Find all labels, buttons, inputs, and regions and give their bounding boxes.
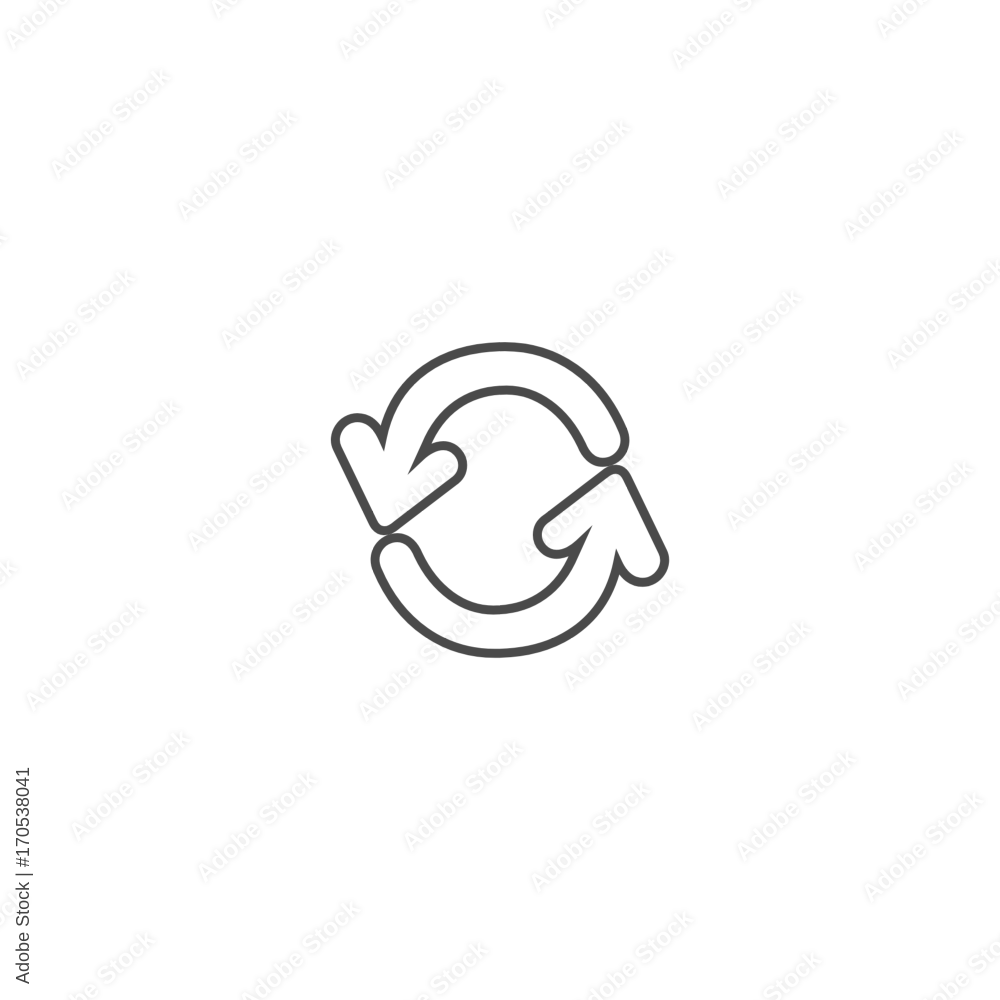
watermark pattern: Adobe Stock <box>503 113 636 236</box>
watermark pattern: Adobe Stock <box>674 283 807 406</box>
watermark pattern: Adobe Stock <box>396 734 529 857</box>
watermark pattern: Adobe Stock <box>523 775 656 898</box>
watermark pattern: Adobe Stock <box>513 444 646 567</box>
watermark pattern: Adobe Stock <box>341 273 474 396</box>
watermark pattern: Adobe Stock <box>836 123 969 246</box>
watermark pattern: Adobe Stock <box>223 563 356 686</box>
watermark pattern: Adobe Stock <box>386 403 519 526</box>
watermark pattern: Adobe Stock <box>213 232 346 355</box>
watermark pattern: Adobe Stock <box>376 72 509 195</box>
watermark pattern: Adobe Stock <box>556 573 689 696</box>
watermark pattern: Adobe Stock <box>170 103 303 226</box>
watermark pattern: Adobe Stock <box>729 744 862 867</box>
watermark pattern: Adobe Stock <box>8 263 141 386</box>
watermark pattern: Adobe Stock <box>546 242 679 365</box>
watermark pattern: Adobe Stock <box>53 393 186 516</box>
watermark pattern: Adobe Stock <box>709 82 842 205</box>
watermark pattern: Adobe Stock <box>719 413 852 536</box>
watermark pattern: Adobe Stock <box>63 724 196 847</box>
icon: circular refresh arrows <box>335 347 665 653</box>
watermark pattern: Adobe Stock <box>18 594 151 717</box>
watermark pattern: Adobe Stock <box>43 62 176 185</box>
watermark pattern: Adobe Stock <box>684 614 817 737</box>
icon: upper arrow pointing left <box>335 347 625 531</box>
watermark pattern: Adobe Stock <box>180 434 313 557</box>
watermark pattern: Adobe Stock <box>846 454 979 577</box>
vertical credit text: Adobe Stock | #170538041 <box>13 767 33 984</box>
icon: lower arrow pointing right <box>375 469 665 653</box>
watermark pattern: Adobe Stock <box>351 604 484 727</box>
watermark pattern: Adobe Stock <box>190 765 323 888</box>
watermark pattern: Adobe Stock <box>856 785 989 908</box>
